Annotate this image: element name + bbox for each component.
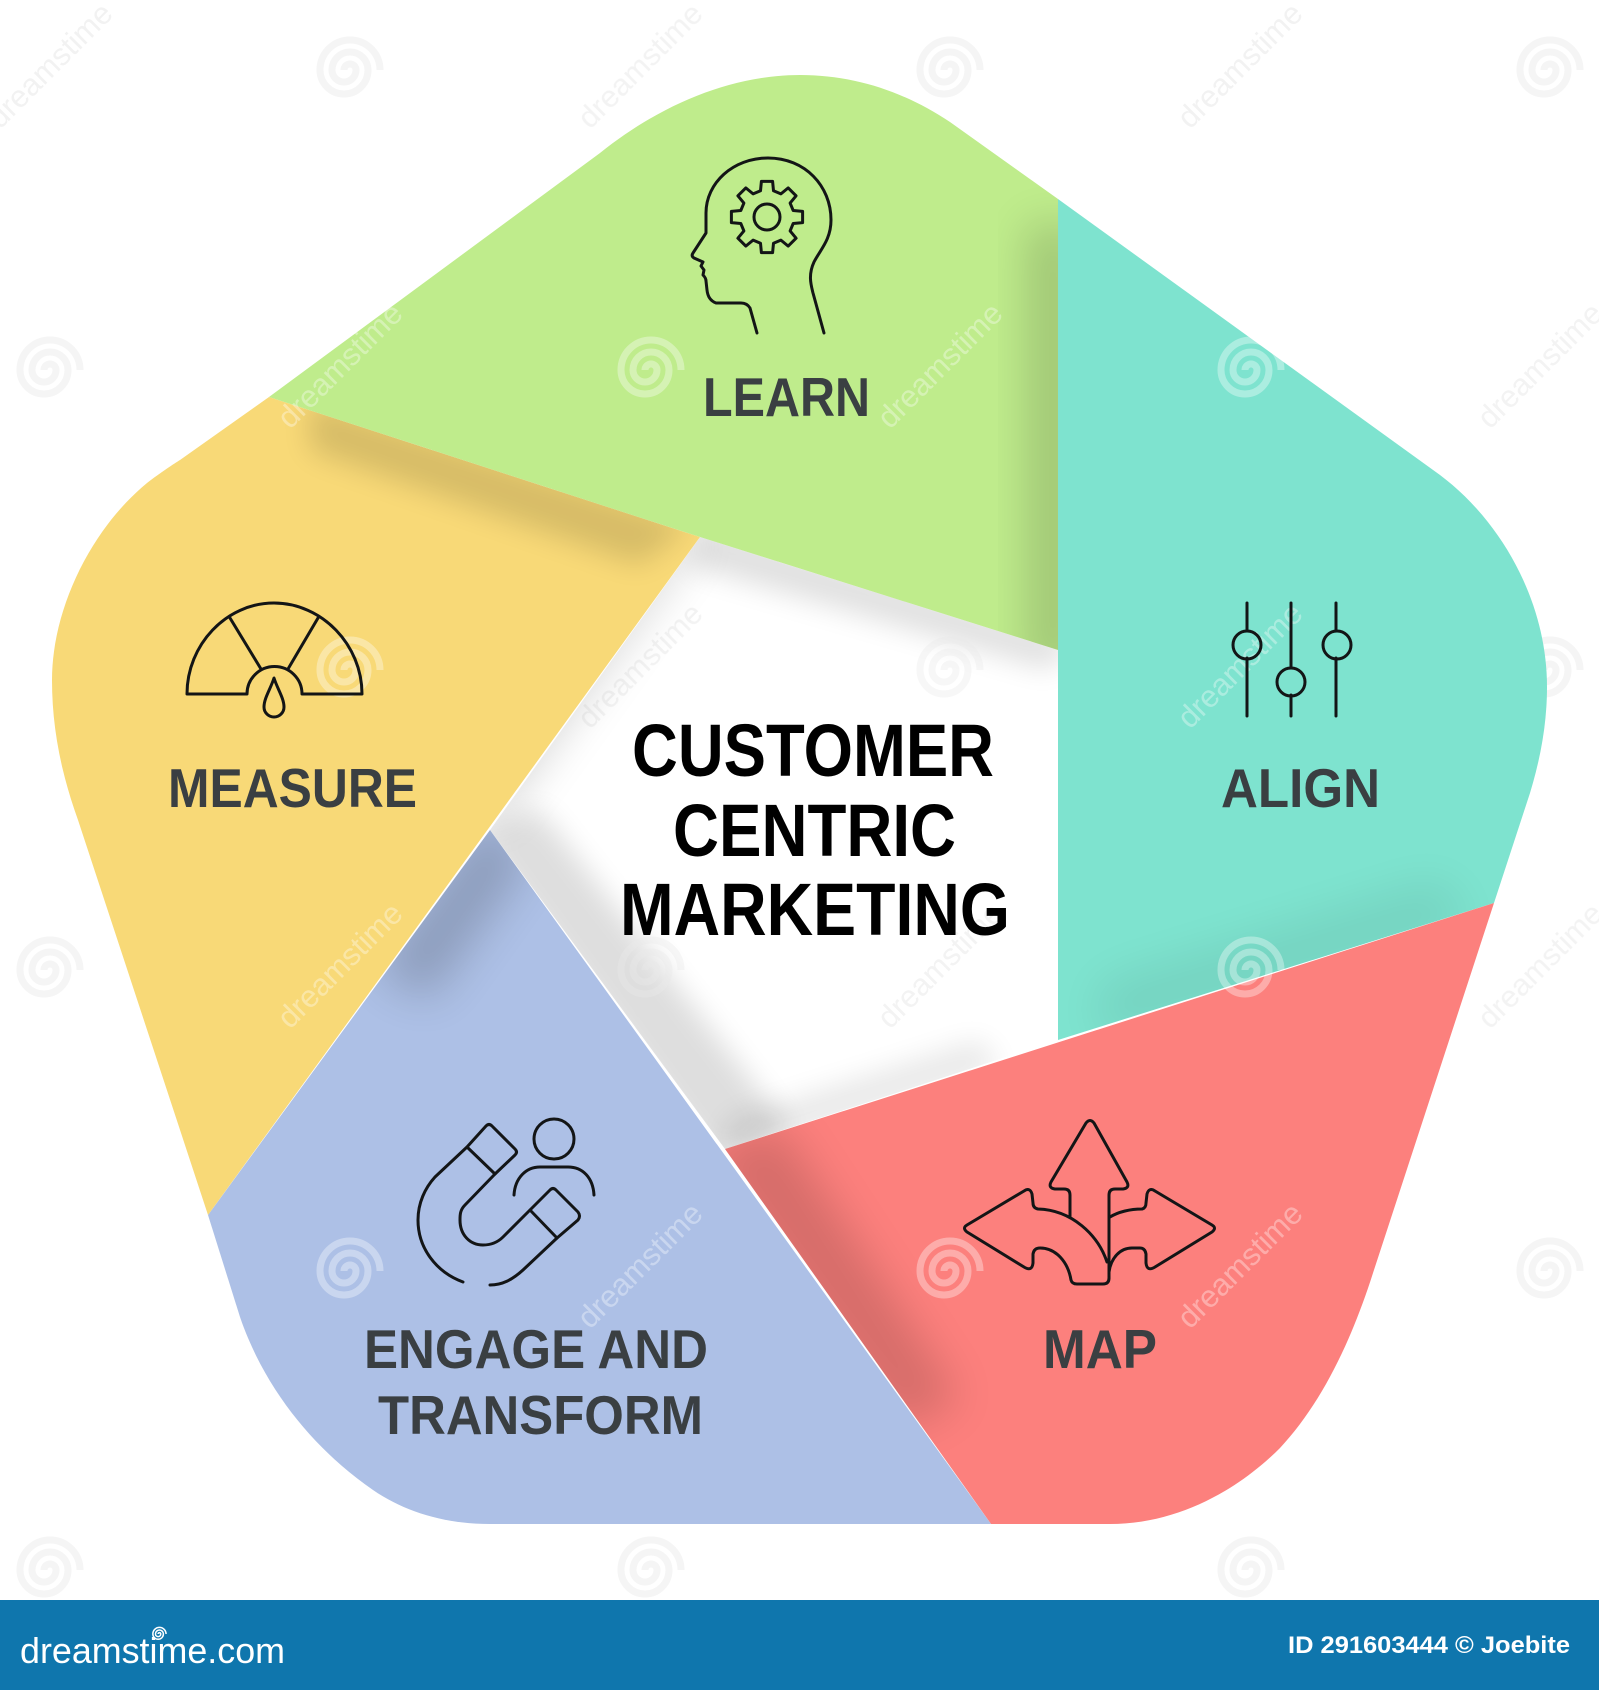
panel: red map segment <box>700 903 1494 1524</box>
watermark text: dreamstime <box>270 296 409 435</box>
heading: LEARN: LEARN <box>703 366 870 428</box>
watermark spirals <box>320 340 1281 1295</box>
heading: ENGAGE AND TRANSFORM <box>364 1318 708 1446</box>
icon: gauge <box>187 603 362 717</box>
icon: three way arrows <box>964 1120 1214 1284</box>
title: customer centric marketing: CENTRIC <box>673 789 956 872</box>
watermark text: dreamstime <box>570 1196 709 1335</box>
footer bar <box>0 1600 1599 1690</box>
watermark text <box>0 0 1599 1335</box>
panel: blue engage segment <box>208 810 991 1524</box>
footer credit: ID 291603444 © Joebite <box>1288 1632 1570 1659</box>
heading: MEASURE: MEASURE <box>168 757 417 819</box>
watermark text: dreamstime <box>270 896 409 1035</box>
watermark text: dreamstime <box>1170 596 1309 735</box>
panel: center white with shadows <box>490 537 1058 1149</box>
footer logo: dreamstime.com: dreamstime.com <box>20 1630 285 1671</box>
title: customer centric marketing: CUSTOMER <box>632 709 994 792</box>
panel: yellow measure segment <box>52 397 700 1215</box>
icon: sliders <box>1233 603 1351 716</box>
heading: ALIGN: ALIGN <box>1221 757 1380 819</box>
heading: ENGAGE AND TRANSFORM: ENGAGE AND <box>364 1318 708 1380</box>
title: customer centric marketing <box>620 709 1010 951</box>
watermark text: dreamstime <box>870 296 1009 435</box>
watermark text: dreamstime <box>1170 1196 1309 1335</box>
watermark text: dreamstime <box>870 896 1009 1035</box>
icon: head with gear <box>692 158 831 333</box>
panel: teal align segment <box>1058 199 1547 1040</box>
heading: MAP: MAP <box>1043 1318 1157 1380</box>
heading: ENGAGE AND TRANSFORM: TRANSFORM <box>378 1384 703 1446</box>
watermark text: dreamstime <box>570 596 709 735</box>
icon: magnet attracting person <box>418 1119 594 1285</box>
title: customer centric marketing: MARKETING <box>620 868 1010 951</box>
panel: green learn segment <box>269 75 1078 675</box>
